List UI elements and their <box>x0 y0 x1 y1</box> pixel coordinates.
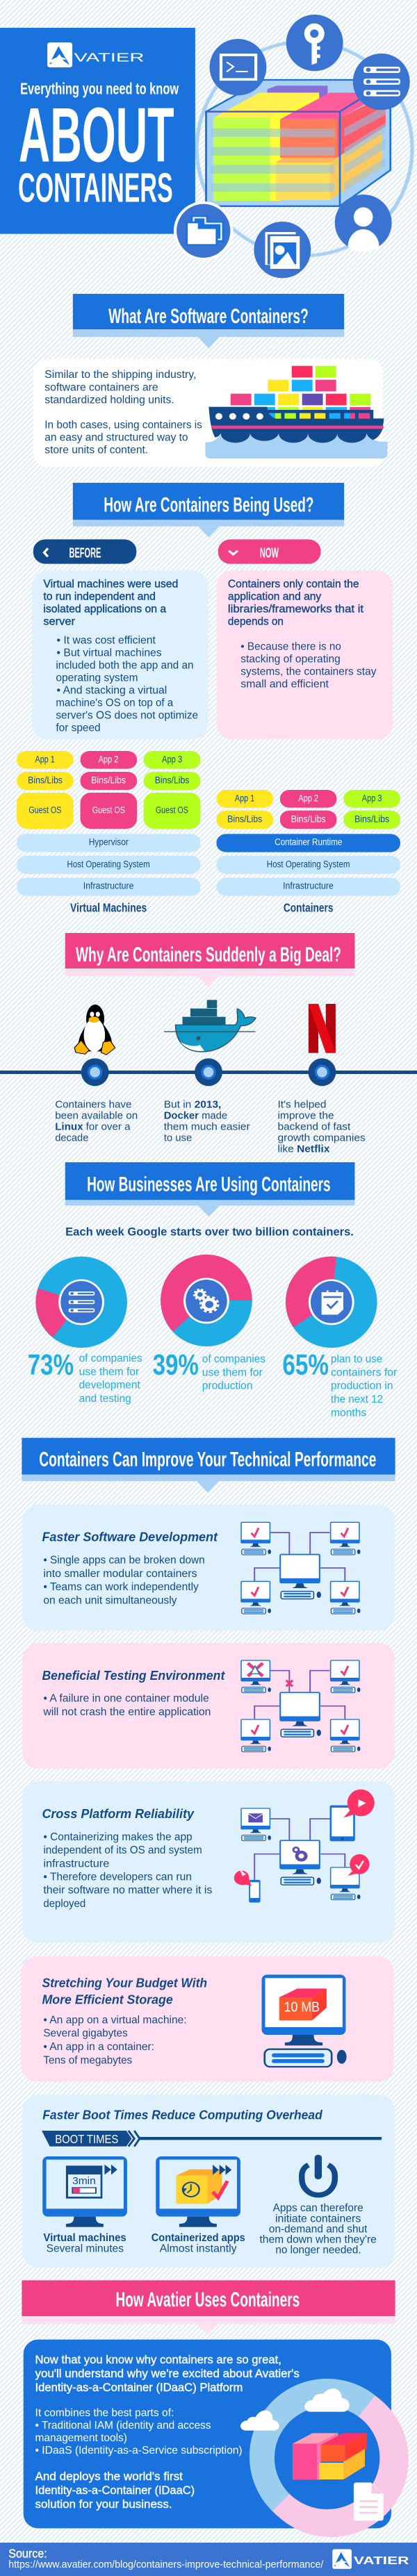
panel: now: stacking of operating <box>240 652 341 665</box>
panel: stretching your budget: Stretching Your Budget With <box>42 1976 207 1990</box>
labels: Apps can therefore <box>273 2202 363 2214</box>
panel: before <box>32 570 208 739</box>
icon: netflix <box>309 1004 336 1053</box>
heading <box>22 2280 395 2335</box>
icon: monitor with 10 MB box: 10 MB <box>284 1999 320 2015</box>
panel: before: to run independent and <box>43 589 156 602</box>
labels: Containerized apps <box>152 2232 245 2244</box>
diagram: virtual machines stack: Bins/Libs <box>28 775 63 786</box>
text block: standardized holding units. <box>44 393 174 406</box>
panel: idaac: It combines the best parts of: <box>35 2406 174 2419</box>
illustration: ring with clouds and containers <box>240 2379 409 2537</box>
section: avatier platform and footer <box>0 2340 417 2576</box>
panel: stretching your budget: • An app on a virtual machine: <box>43 2013 187 2026</box>
panel: cross platform reliability: Cross Platform Reliability <box>42 1807 195 1822</box>
heading <box>65 1162 354 1216</box>
icon: monitor with 10 MB box <box>262 1974 347 2067</box>
diagram: containers stack: App 1 <box>235 793 254 804</box>
diagram: virtual machines stack <box>17 751 201 914</box>
panel: faster software development: on each unit simultaneously <box>43 1593 177 1606</box>
icon: monitor with 3 minute window <box>42 2156 127 2227</box>
text block <box>44 368 202 456</box>
panel: cross platform reliability: deployed <box>43 1897 85 1910</box>
hero title panel: ABOUT <box>19 92 174 178</box>
panel: stretching your budget: More Efficient Storage <box>42 1993 173 2007</box>
panel: before: operating system <box>56 671 138 684</box>
labels: on-demand and shut <box>269 2223 368 2235</box>
panel: before: • But virtual machines <box>57 646 162 659</box>
panel: before: server's OS does not optimize <box>56 709 198 721</box>
banner: boot times <box>42 2131 382 2147</box>
labels: them down when they're <box>259 2234 377 2245</box>
diagram: containers stack <box>216 790 400 914</box>
icon: monitor with 3 minute window: 3min <box>72 2176 96 2187</box>
diagram: virtual machines stack: App 1 <box>35 754 55 765</box>
text: linux: decade <box>55 1132 89 1143</box>
panel: now <box>216 570 393 739</box>
diagram: containers stack: Infrastructure <box>283 881 334 891</box>
labels <box>43 2202 377 2256</box>
stat: 39 percent: of companies <box>202 1353 265 1365</box>
stat: 73 percent: of companies <box>79 1353 142 1364</box>
panel: cross platform reliability: infrastructure <box>43 1856 109 1869</box>
panel: cross platform reliability <box>22 1781 395 1943</box>
icon: docker whale <box>164 1000 256 1052</box>
labels: initiate containers <box>275 2213 361 2224</box>
title CONTAINERS: CONTAINERS <box>18 166 173 211</box>
section: before and now comparison <box>17 570 400 914</box>
stat: 73 percent: 73% <box>28 1349 74 1381</box>
panel: before: server <box>43 614 75 627</box>
donut: 39 percent <box>161 1255 252 1346</box>
hero illustration: container cube with orbiting icons <box>197 15 412 278</box>
pill: before <box>33 539 136 564</box>
text block: an easy and structured way to <box>44 430 188 443</box>
text: netflix: improve the <box>277 1110 334 1121</box>
panel: idaac: Now that you know why containers are so great, <box>35 2353 281 2366</box>
icon: key <box>286 15 343 71</box>
stat: 73 percent: and testing <box>79 1393 131 1405</box>
subtitle: Everything you need to know <box>20 80 179 98</box>
panel: before: machine's OS on top of a <box>56 696 173 709</box>
panel: stretching your budget: • An app in a container: <box>43 2040 154 2053</box>
labels: Several minutes <box>47 2243 124 2254</box>
section: what are software containers <box>33 294 388 564</box>
text block: store units of content. <box>44 443 148 456</box>
footer: Source: <box>8 2547 47 2560</box>
icon: image <box>254 222 311 278</box>
panel: now: • Because there is no <box>240 640 341 652</box>
icon: linux penguin <box>74 1005 115 1055</box>
panel: cross platform reliability: their software no matter where it is <box>43 1883 212 1896</box>
panel: now: libraries/frameworks that it <box>228 602 363 615</box>
footer: https://www.avatier.com/blog/containers-improve-technical-performance/ <box>8 2559 324 2570</box>
diagram: containers stack: Bins/Libs <box>354 814 389 825</box>
diagram: virtual machines stack: Bins/Libs <box>91 775 126 786</box>
panel: before: Virtual machines were used <box>43 577 178 590</box>
diagram: virtual machines stack: Guest OS <box>92 805 125 816</box>
text: netflix: backend of fast <box>277 1121 351 1132</box>
diagram: virtual machines stack: App 3 <box>162 754 182 765</box>
donut: 73 percent <box>35 1257 127 1348</box>
diagram: virtual machines stack: Host Operating System <box>67 859 150 870</box>
icon: user <box>335 195 392 251</box>
diagram: containers stack: Containers <box>284 901 333 914</box>
text: docker: Docker made <box>164 1110 227 1121</box>
panel: idaac <box>24 2340 391 2528</box>
section: how businesses use containers <box>22 1162 398 1492</box>
panel: before: • It was cost efficient <box>57 634 156 646</box>
icon: container ship <box>205 366 388 459</box>
diagram: virtual machines stack: Bins/Libs <box>155 775 189 786</box>
panel: stretching your budget: Several gigabytes <box>43 2026 128 2039</box>
panel: cross platform reliability: independent of its OS and system <box>43 1843 202 1856</box>
diagram: virtual machines stack: Guest OS <box>28 805 61 816</box>
panel: idaac: And deploys the world's first <box>35 2470 183 2483</box>
panel: now: depends on <box>228 614 284 627</box>
icon: monitor with box and clock <box>156 2156 240 2227</box>
heading <box>73 483 344 537</box>
text: docker: them much easier <box>164 1121 250 1132</box>
panel: faster software development: • Single apps can be broken down <box>43 1553 205 1566</box>
panel: stretching your budget <box>21 1956 394 2082</box>
heading <box>73 294 344 349</box>
diagram: virtual machines stack: App 2 <box>99 754 118 765</box>
icon: folders <box>174 201 234 261</box>
text: docker: But in 2013, <box>164 1099 221 1110</box>
stat: 65 percent: plan to use <box>331 1353 382 1365</box>
diagram: network <box>240 1522 360 1614</box>
panel: before: for speed <box>56 721 101 734</box>
footer logo: VATIER <box>354 2555 409 2567</box>
panel: now: systems, the containers stay <box>240 665 377 677</box>
diagram: multi-device network <box>234 1790 375 1903</box>
stat: 65 percent: production in <box>331 1380 393 1392</box>
stat: 39 percent: 39% <box>153 1349 199 1381</box>
diagram: containers stack: App 3 <box>362 793 382 804</box>
panel: cross platform reliability: • Therefore developers can run <box>43 1869 192 1883</box>
panel: idaac: you'll understand why we're excited about Avatier's <box>35 2367 300 2380</box>
panel: before: included both the app and an <box>56 659 194 671</box>
panel: cross platform reliability: • Containerizing makes the app <box>43 1830 193 1843</box>
text block: software containers are <box>44 380 158 393</box>
panel: before: • And stacking a virtual <box>57 684 167 696</box>
stat: 39 percent <box>153 1349 265 1392</box>
Avatier logo <box>47 42 144 67</box>
stat: 73 percent <box>28 1349 142 1405</box>
panel: idaac: Identity-as-a-Container (IDaaC) Platform <box>35 2381 243 2394</box>
diagram: containers stack: Bins/Libs <box>227 814 262 825</box>
diagram: virtual machines stack: Infrastructure <box>83 881 133 891</box>
panel: stretching your budget: Tens of megabytes <box>43 2053 132 2066</box>
section: boot times and avatier heading <box>22 2095 395 2335</box>
panel: faster software development <box>22 1505 395 1630</box>
statement: Each week Google starts over two billion containers. <box>65 1225 354 1238</box>
panel: now: application and any <box>228 589 322 602</box>
panel: beneficial testing environment: will not crash the entire application <box>42 1705 211 1718</box>
labels: Virtual machines <box>43 2232 126 2244</box>
stat: 65 percent: the next 12 <box>331 1394 383 1405</box>
diagram: virtual machines stack: Virtual Machines <box>70 901 147 914</box>
stat: 39 percent: use them for <box>202 1367 263 1378</box>
labels: Almost instantly <box>160 2243 237 2254</box>
panel: beneficial testing environment: Beneficial Testing Environment <box>42 1669 225 1683</box>
panel: faster boot times: Faster Boot Times Reduce Computing Overhead <box>42 2108 322 2122</box>
icon: servers <box>353 53 410 110</box>
panel: faster software development: • Teams can work independently <box>43 1580 199 1593</box>
diagram: containers stack: Container Runtime <box>275 837 342 848</box>
text: netflix: growth companies <box>277 1132 366 1143</box>
pill: now: NOW <box>260 545 279 561</box>
stat: 65 percent <box>282 1349 398 1419</box>
footer <box>0 2543 417 2576</box>
diagram: virtual machines stack: Hypervisor <box>89 837 129 848</box>
stat: 65 percent: 65% <box>282 1349 329 1381</box>
panel: idaac: • Traditional IAM (identity and access <box>35 2418 211 2431</box>
heading <box>22 1438 395 1492</box>
panel: idaac: Identity-as-a-Container (IDaaC) <box>35 2484 195 2497</box>
pill: before: BEFORE <box>69 545 101 561</box>
text: docker <box>164 1099 250 1143</box>
Avatier logo: VATIER <box>74 51 144 64</box>
panel: beneficial testing environment: • A failure in one container module <box>43 1692 209 1704</box>
stat: 65 percent: months <box>331 1407 366 1419</box>
section: benefit panels three and four <box>21 1781 395 2082</box>
labels: no longer needed. <box>275 2245 361 2256</box>
text: netflix <box>277 1099 366 1155</box>
panel: idaac: • IDaaS (Identity-as-a-Service subscription) <box>35 2443 243 2457</box>
section: benefit panels one and two <box>22 1505 395 1769</box>
donut: 65 percent <box>286 1257 377 1348</box>
cube body <box>206 80 391 206</box>
diagram: virtual machines stack: Guest OS <box>156 805 188 816</box>
diagram: containers stack: App 2 <box>298 793 318 804</box>
text: docker: to use <box>164 1132 192 1143</box>
text: linux: Containers have <box>55 1099 132 1110</box>
panel: faster software development: into smaller modular containers <box>43 1567 197 1580</box>
text: linux: Linux for over a <box>55 1121 131 1132</box>
text: linux: been available on <box>55 1110 138 1121</box>
panel: faster software development: Faster Software Development <box>42 1530 218 1544</box>
diagram: containers stack: Host Operating System <box>267 859 350 870</box>
hero title panel <box>0 28 195 234</box>
heading <box>65 933 354 988</box>
panel: definition <box>33 359 388 467</box>
text block: Similar to the shipping industry, <box>44 368 196 381</box>
footer logo <box>332 2549 409 2569</box>
stat: 65 percent: containers for <box>331 1367 398 1378</box>
stat: 73 percent: development <box>79 1380 140 1391</box>
panel: idaac: solution for your business. <box>35 2497 172 2511</box>
section: why containers are a big deal <box>0 933 417 1155</box>
panel: now: small and efficient <box>240 677 329 690</box>
panel: beneficial testing environment <box>22 1643 395 1769</box>
diagram: containers stack: Bins/Libs <box>291 814 326 825</box>
timeline <box>0 1058 417 1086</box>
text: netflix: It's helped <box>277 1099 327 1110</box>
diagram: network with failed node <box>240 1660 360 1752</box>
text block: In both cases, using containers is <box>44 418 202 431</box>
icon: terminal <box>210 39 266 95</box>
banner: boot times: BOOT TIMES <box>55 2132 118 2147</box>
text: linux <box>55 1099 138 1143</box>
panel: before: isolated applications on a <box>43 602 167 615</box>
icon: power button <box>302 2155 335 2195</box>
stat: 39 percent: production <box>202 1380 253 1392</box>
stat: 73 percent: use them for <box>79 1366 140 1378</box>
panel: faster boot times <box>22 2095 395 2268</box>
text: netflix: like Netflix <box>277 1143 330 1155</box>
pill: now <box>218 539 320 564</box>
panel: now: Containers only contain the <box>228 577 359 590</box>
panel: idaac: management tools) <box>35 2431 127 2444</box>
